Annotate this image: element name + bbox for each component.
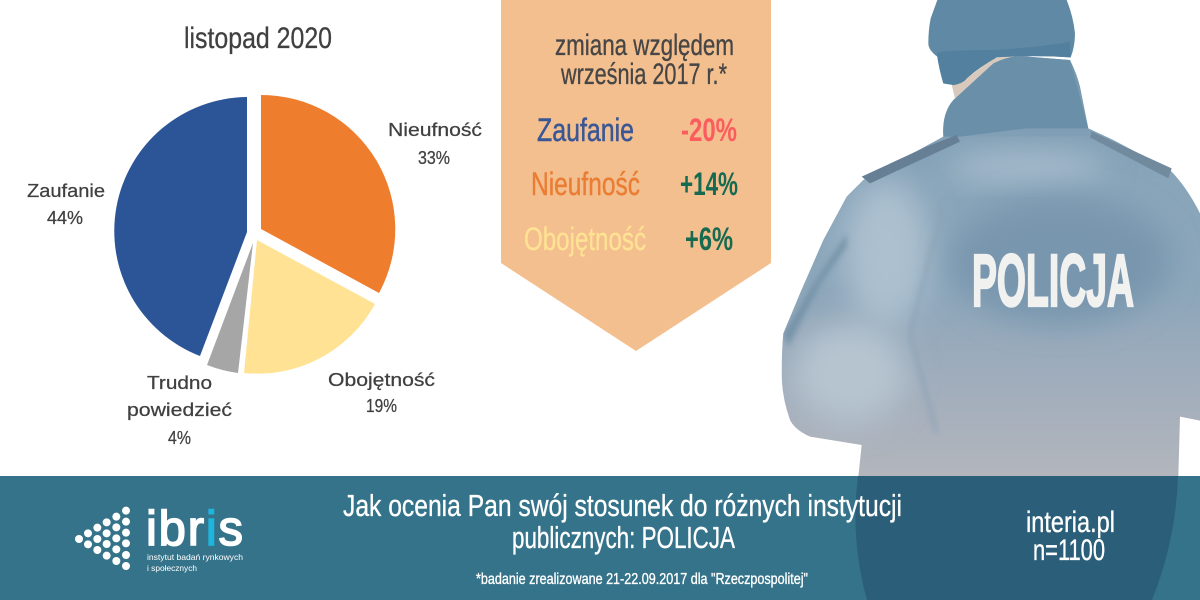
label: Nieufność: 33% xyxy=(418,147,450,168)
logo wordmark: ibris xyxy=(146,502,243,556)
footer question: publicznych: POLICJA xyxy=(512,520,735,555)
jacket xyxy=(780,53,1200,480)
shoulder strap left xyxy=(862,135,960,183)
logo subtitle: instytut badań rynkowych xyxy=(147,552,243,562)
label: Nieufność xyxy=(388,119,482,168)
row: Nieufność +14%: Nieufność xyxy=(531,166,640,202)
label: Trudno powiedzieć: Trudno xyxy=(147,372,212,393)
label: Trudno powiedzieć: 4% xyxy=(168,427,191,448)
label: Obojętność xyxy=(328,369,435,416)
row: Obojętność +6%: Obojętność xyxy=(524,221,646,257)
slice: Obojętność 19% xyxy=(244,240,375,374)
slice: Zaufanie 44% xyxy=(114,97,247,356)
label: Trudno powiedzieć: powiedzieć xyxy=(127,399,232,420)
label: Trudno powiedzieć xyxy=(127,372,232,448)
slice: Trudno powiedzieć 4% xyxy=(207,243,253,373)
panel: change since September 2017 xyxy=(501,0,771,351)
footer question xyxy=(343,488,902,555)
row: Zaufanie -20%: Zaufanie xyxy=(537,112,634,148)
source and sample size xyxy=(1026,506,1115,567)
footer band xyxy=(0,476,1200,600)
hat xyxy=(928,0,1075,85)
logo subtitle: i społecznych xyxy=(147,563,197,573)
panel heading: września 2017 r.* xyxy=(560,58,727,91)
logo dots xyxy=(75,507,130,570)
label: Zaufanie xyxy=(27,180,105,228)
source and sample size: n=1100 xyxy=(1033,534,1105,567)
logo subtitle xyxy=(147,552,243,573)
jacket showing through footer xyxy=(855,476,1178,600)
panel heading xyxy=(555,29,734,91)
label: Zaufanie: 44% xyxy=(47,207,83,228)
source and sample size: interia.pl xyxy=(1026,506,1115,539)
chart title: listopad 2020 xyxy=(184,22,332,55)
shoulder strap right xyxy=(1090,132,1172,178)
footnote: *badanie zrealizowane 21-22.09.2017 dla "Rzeczpospolitej" xyxy=(476,571,808,588)
logo: ibris xyxy=(75,502,243,573)
row: Zaufanie -20% xyxy=(537,112,737,148)
row: Zaufanie -20%: -20% xyxy=(681,112,737,148)
label: Obojętność: 19% xyxy=(366,395,397,416)
skin of neck xyxy=(952,55,1020,98)
panel heading: zmiana względem xyxy=(555,29,734,62)
row: Obojętność +6%: +6% xyxy=(685,221,733,257)
footer question: Jak ocenia Pan swój stosunek do różnych instytucji xyxy=(343,488,902,523)
row: Nieufność +14%: +14% xyxy=(680,166,738,202)
row: Nieufność +14% xyxy=(531,166,738,202)
label: Nieufność: Nieufność xyxy=(388,119,482,140)
photo: police officer from behind xyxy=(780,0,1200,480)
pie chart xyxy=(114,95,395,374)
label: Obojętność: Obojętność xyxy=(328,369,435,390)
slice: Nieufność 33% xyxy=(261,95,395,293)
label: Zaufanie: Zaufanie xyxy=(27,180,105,201)
